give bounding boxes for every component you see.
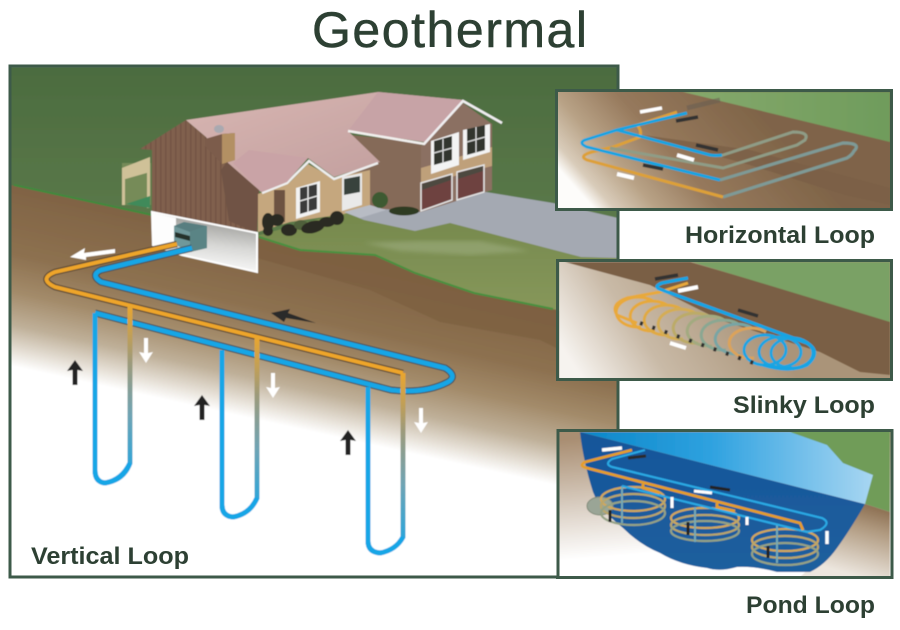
blue lead [657, 278, 814, 369]
vertical bore 3 [368, 373, 403, 553]
label: vertical loop: Vertical Loop [31, 543, 189, 570]
label: horizontal loop: Horizontal Loop [685, 222, 875, 249]
chimney [205, 133, 235, 164]
arrows: black up [67, 360, 356, 455]
lawn highlight [364, 241, 530, 255]
pillar [274, 190, 285, 222]
icon: deck [122, 157, 151, 208]
coils [616, 297, 813, 368]
title: Geothermal [312, 2, 587, 58]
panel 1 border [556, 90, 892, 210]
icon: shrubs [262, 192, 419, 236]
inner grey loop [610, 132, 806, 168]
arrow: black return [271, 309, 316, 323]
window [296, 181, 320, 219]
label: pond loop: Pond Loop [746, 592, 875, 619]
arrows: white down [139, 338, 428, 433]
ground edge right [259, 237, 553, 309]
entry stoop [344, 205, 386, 218]
grass [683, 92, 890, 142]
lawn [150, 192, 618, 330]
blue return pipe [95, 248, 452, 391]
white cut-out right of main panel [620, 210, 900, 260]
front gable shadow [221, 162, 259, 233]
blue pipe [608, 450, 827, 532]
front gable trim [262, 161, 378, 193]
soil [10, 185, 618, 576]
ground edge [14, 185, 152, 215]
orange pipe [582, 450, 803, 530]
coil 2 [671, 508, 739, 541]
basement cutaway [152, 212, 257, 272]
coil 3 [752, 529, 818, 565]
panel 3 border [556, 430, 892, 578]
risers [622, 486, 777, 563]
panel 2 border [558, 260, 892, 380]
grass [790, 431, 890, 512]
pipe stub [687, 100, 720, 108]
panel: horizontal loop [557, 91, 892, 209]
eave trim [348, 131, 425, 144]
door [342, 173, 362, 211]
driveway [344, 192, 618, 258]
dark soil band [257, 237, 618, 378]
orange supply pipe [46, 244, 403, 373]
left siding wall [140, 120, 259, 233]
dark soil band [643, 135, 890, 205]
deep water [580, 432, 865, 572]
blue pipes [582, 113, 722, 180]
coil clips [640, 323, 762, 366]
brown upper soil [565, 262, 890, 375]
arrow: white supply [70, 248, 115, 260]
icon: heat pump unit [174, 222, 207, 252]
arrows [602, 448, 827, 558]
outer orange [583, 112, 723, 197]
front section wall [258, 164, 370, 232]
vertical bore 1 [95, 305, 130, 483]
white cut-out middle [620, 380, 900, 430]
icon: house [140, 92, 502, 233]
main roof [186, 92, 463, 192]
panel: vertical loop [10, 67, 618, 576]
basement left wall [153, 213, 176, 251]
garage door left [421, 174, 452, 211]
right wing wall [350, 135, 421, 212]
grass background [10, 67, 618, 267]
panel: slinky loop [559, 261, 892, 379]
pipe shadow blob [587, 497, 613, 515]
vertical bore 2 [222, 337, 257, 517]
arrows [655, 275, 758, 348]
upper window left [431, 132, 459, 174]
arrows [617, 108, 718, 178]
right soil [800, 504, 890, 577]
garage door right [457, 165, 484, 200]
water surface [580, 432, 873, 504]
gable trim [424, 101, 502, 144]
grass [692, 262, 890, 322]
tan band [421, 147, 492, 185]
orange lead [615, 283, 688, 323]
front gable roof [233, 150, 308, 192]
right roof panel [348, 92, 463, 142]
label: slinky loop: Slinky Loop [733, 392, 875, 419]
outer pipe loop [720, 143, 856, 197]
upper window right [463, 124, 490, 160]
upper gable wall [421, 103, 492, 212]
coil 1 [601, 487, 665, 525]
main frame [10, 66, 618, 577]
panel: pond loop [559, 431, 892, 577]
